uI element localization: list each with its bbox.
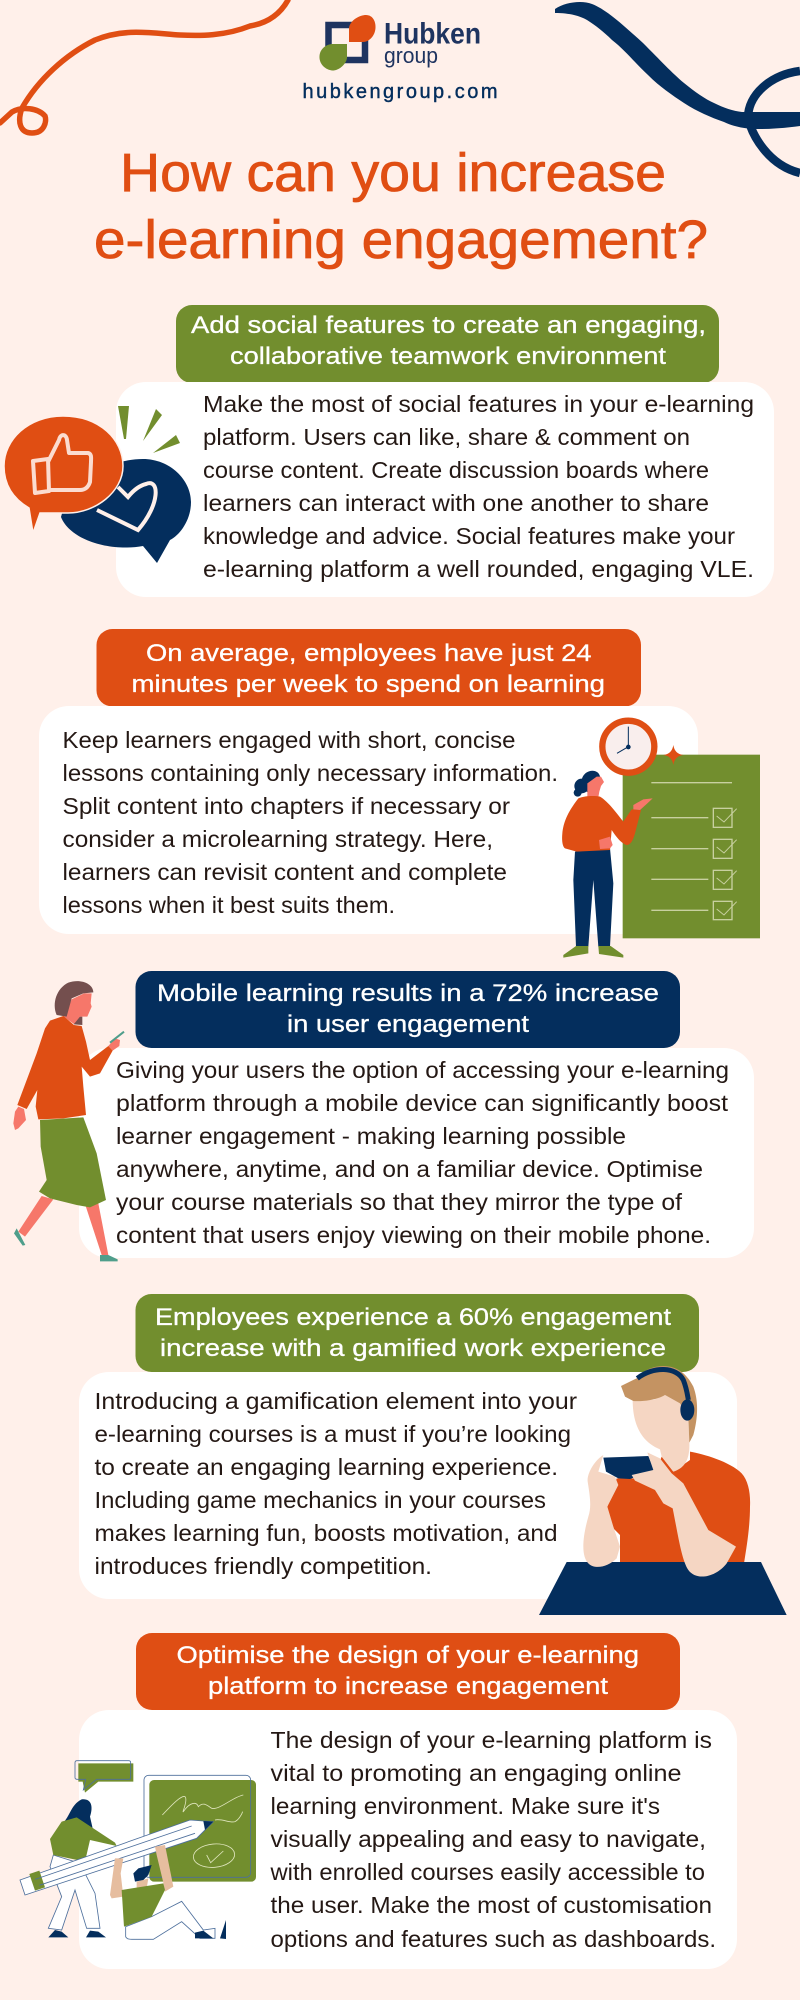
body text: time for learning: lessons when it best suits them. — [62, 892, 395, 918]
woman — [48, 1799, 117, 1937]
card: gamification — [79, 1372, 737, 1599]
body text: gamification: Including game mechanics in your courses — [94, 1487, 546, 1513]
body text: gamification: introduces friendly competition. — [94, 1553, 432, 1579]
heading pill: platform design: platform to increase engagement — [208, 1673, 608, 1700]
body text: gamification: makes learning fun, boosts motivation, and — [94, 1520, 558, 1546]
heading pill: time for learning: On average, employees have just 24 — [146, 640, 592, 667]
heading pill: platform design: Optimise the design of your e-learning — [176, 1642, 639, 1669]
body text: social features: platform. Users can like, share & comment on — [203, 424, 690, 450]
panel: mobile learning — [13, 971, 754, 1261]
title: e-learning engagement? — [94, 210, 708, 270]
card: social features — [116, 382, 774, 597]
body text: platform design: options and features such as dashboards. — [270, 1926, 716, 1952]
body text: social features: e-learning platform a well rounded, engaging VLE. — [203, 556, 754, 582]
heading pill: platform design — [136, 1633, 680, 1710]
body text: gamification — [94, 1388, 577, 1579]
checklist board — [623, 755, 760, 938]
heading pill: social features: Add social features to create an engaging, — [191, 312, 706, 339]
heading pill: gamification: increase with a gamified work experience — [160, 1335, 666, 1362]
heading pill: social features: collaborative teamwork environment — [230, 343, 666, 370]
logo: Hubken group — [319, 15, 481, 71]
decorative navy ribbon — [555, 2, 800, 173]
woman — [562, 771, 653, 958]
star — [663, 745, 683, 765]
website url: hubkengroup.com — [302, 81, 498, 103]
body text: mobile learning: anywhere, anytime, and on a familiar device. Optimise — [116, 1156, 703, 1182]
body text: mobile learning: platform through a mobile device can significantly boost — [116, 1090, 729, 1116]
body text: platform design: vital to promoting an engaging online — [270, 1760, 682, 1786]
board — [144, 1775, 256, 1882]
heading pill: mobile learning: in user engagement — [287, 1011, 529, 1038]
title: How can you increase — [120, 143, 666, 203]
body text: time for learning: Keep learners engaged with short, concise — [62, 727, 516, 753]
body text: gamification: e-learning courses is a must if you’re looking — [94, 1421, 571, 1447]
body text: social features: Make the most of social features in your e-learning — [203, 391, 754, 417]
body text: time for learning: lessons containing only necessary information. — [62, 760, 558, 786]
illustration: woman walking with phone — [13, 981, 124, 1261]
card: time for learning — [39, 706, 698, 934]
panel: time for learning — [39, 629, 760, 958]
heading pill: mobile learning: Mobile learning results in a 72% increase — [157, 980, 659, 1007]
illustration: people with giant pencil and board — [20, 1761, 256, 1939]
body text: platform design: with enrolled courses easily accessible to — [269, 1859, 705, 1885]
logo subword: group — [384, 43, 438, 68]
body text: mobile learning — [116, 1057, 729, 1248]
logo wordmark: Hubken — [384, 18, 481, 50]
body text: platform design: visually appealing and easy to navigate, — [270, 1826, 706, 1852]
card: mobile learning — [79, 1048, 754, 1258]
body text: platform design — [269, 1727, 716, 1952]
icon: like and heart speech bubbles — [4, 406, 191, 563]
body text: mobile learning: your course materials so that they mirror the type of — [116, 1189, 683, 1215]
body text: social features: learners can interact with one another to share — [203, 490, 709, 516]
body text: social features: course content. Create discussion boards where — [203, 457, 709, 483]
panel: platform design — [20, 1633, 737, 1969]
card: platform design — [79, 1710, 737, 1969]
illustration: woman with checklist and clock — [562, 721, 760, 958]
heading pill: time for learning: minutes per week to spend on learning — [132, 671, 605, 698]
pencil — [20, 1820, 213, 1895]
body text: mobile learning: content that users enjoy viewing on their mobile phone. — [116, 1222, 711, 1248]
body text: time for learning: Split content into chapters if necessary or — [62, 793, 510, 819]
body text: platform design: The design of your e-learning platform is — [270, 1727, 712, 1753]
body text: social features — [203, 391, 754, 582]
body text: platform design: the user. Make the most of customisation — [270, 1892, 712, 1918]
body text: platform design: learning environment. Make sure it's — [270, 1793, 660, 1819]
title — [94, 143, 708, 270]
decorative orange curl — [0, 0, 288, 133]
body text: social features: knowledge and advice. Social features make your — [203, 523, 735, 549]
man — [110, 1845, 226, 1939]
panel: social features — [4, 305, 774, 597]
heading pill: gamification — [136, 1294, 699, 1372]
body text: time for learning: consider a microlearning strategy. Here, — [62, 826, 493, 852]
body text: time for learning: learners can revisit content and complete — [62, 859, 507, 885]
body text: gamification: to create an engaging learning experience. — [94, 1454, 558, 1480]
speech bubble — [75, 1761, 133, 1793]
body text: time for learning — [62, 727, 558, 918]
clock — [602, 721, 654, 773]
illustration: man gaming on phone with headphones — [539, 1366, 787, 1615]
body text: mobile learning: Giving your users the option of accessing your e-learning — [116, 1057, 729, 1083]
heading pill: time for learning — [96, 629, 641, 706]
heading pill: gamification: Employees experience a 60% engagement — [155, 1304, 671, 1331]
body text: mobile learning: learner engagement - making learning possible — [116, 1123, 626, 1149]
panel: gamification — [79, 1294, 787, 1615]
heading pill: social features — [176, 305, 719, 383]
heading pill: mobile learning — [136, 971, 680, 1048]
body text: gamification: Introducing a gamification element into your — [94, 1388, 577, 1414]
logo mark — [319, 15, 376, 71]
